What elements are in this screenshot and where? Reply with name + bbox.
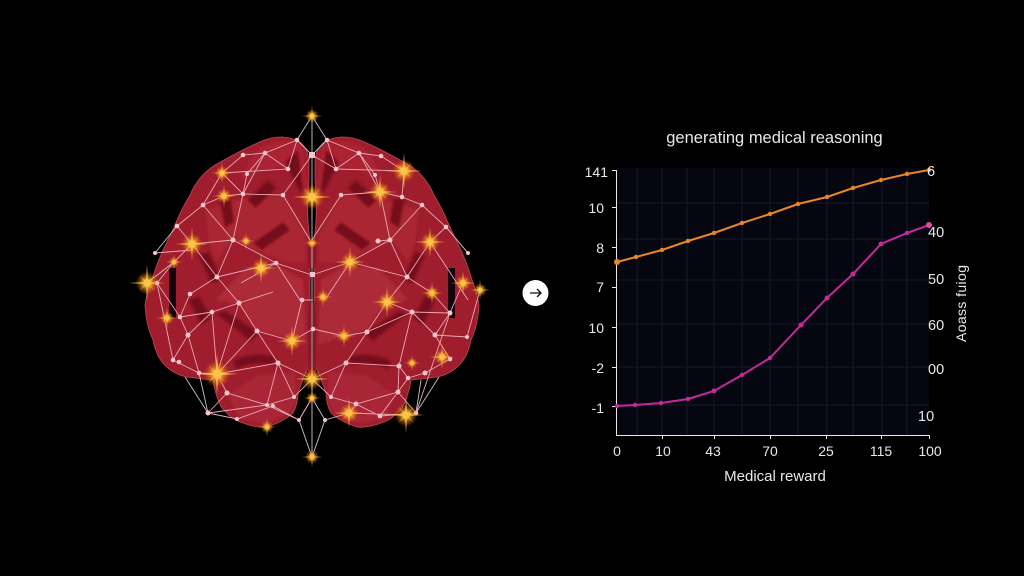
right axis labels: 50 <box>928 272 944 288</box>
left axis labels: 141 <box>585 164 608 180</box>
mesh nodes <box>153 138 470 422</box>
right axis labels: 40 <box>928 225 944 241</box>
x axis labels: 0 <box>613 443 621 459</box>
right axis title: Aoass fuiog <box>953 265 969 342</box>
neural mesh lines <box>155 140 313 420</box>
plot area <box>617 168 929 435</box>
right axis labels <box>918 164 944 425</box>
left axis labels: -2 <box>592 360 604 376</box>
x axis labels: 43 <box>705 443 721 459</box>
x axis labels: 70 <box>762 443 778 459</box>
outer scaffold lines <box>147 116 468 457</box>
right axis labels: 00 <box>928 362 944 378</box>
brain hemispheres <box>145 137 479 427</box>
left axis labels: -1 <box>592 400 604 416</box>
right axis labels: 60 <box>928 318 944 334</box>
x axis labels <box>613 443 942 459</box>
icon: arrow in circle <box>522 280 548 306</box>
left axis labels: 7 <box>596 279 604 295</box>
orange series <box>614 168 931 265</box>
x axis title: Medical reward <box>724 468 826 485</box>
left axis labels: 8 <box>596 240 604 256</box>
left axis labels: 10 <box>588 200 604 216</box>
x axis labels: 115 <box>870 443 892 459</box>
right axis labels: 10 <box>918 409 934 425</box>
magenta series <box>615 222 932 408</box>
chart title: generating medical reasoning <box>666 129 883 147</box>
x axis labels: 10 <box>655 443 671 459</box>
line chart <box>585 164 969 485</box>
x axis labels: 25 <box>818 443 834 459</box>
left axis labels <box>585 164 608 416</box>
left axis labels: 10 <box>588 320 604 336</box>
right axis labels: 6 <box>927 164 935 180</box>
x axis labels: 100 <box>918 443 942 459</box>
brain illustration <box>129 106 491 468</box>
glowing star nodes <box>129 106 491 468</box>
axes <box>612 170 930 439</box>
